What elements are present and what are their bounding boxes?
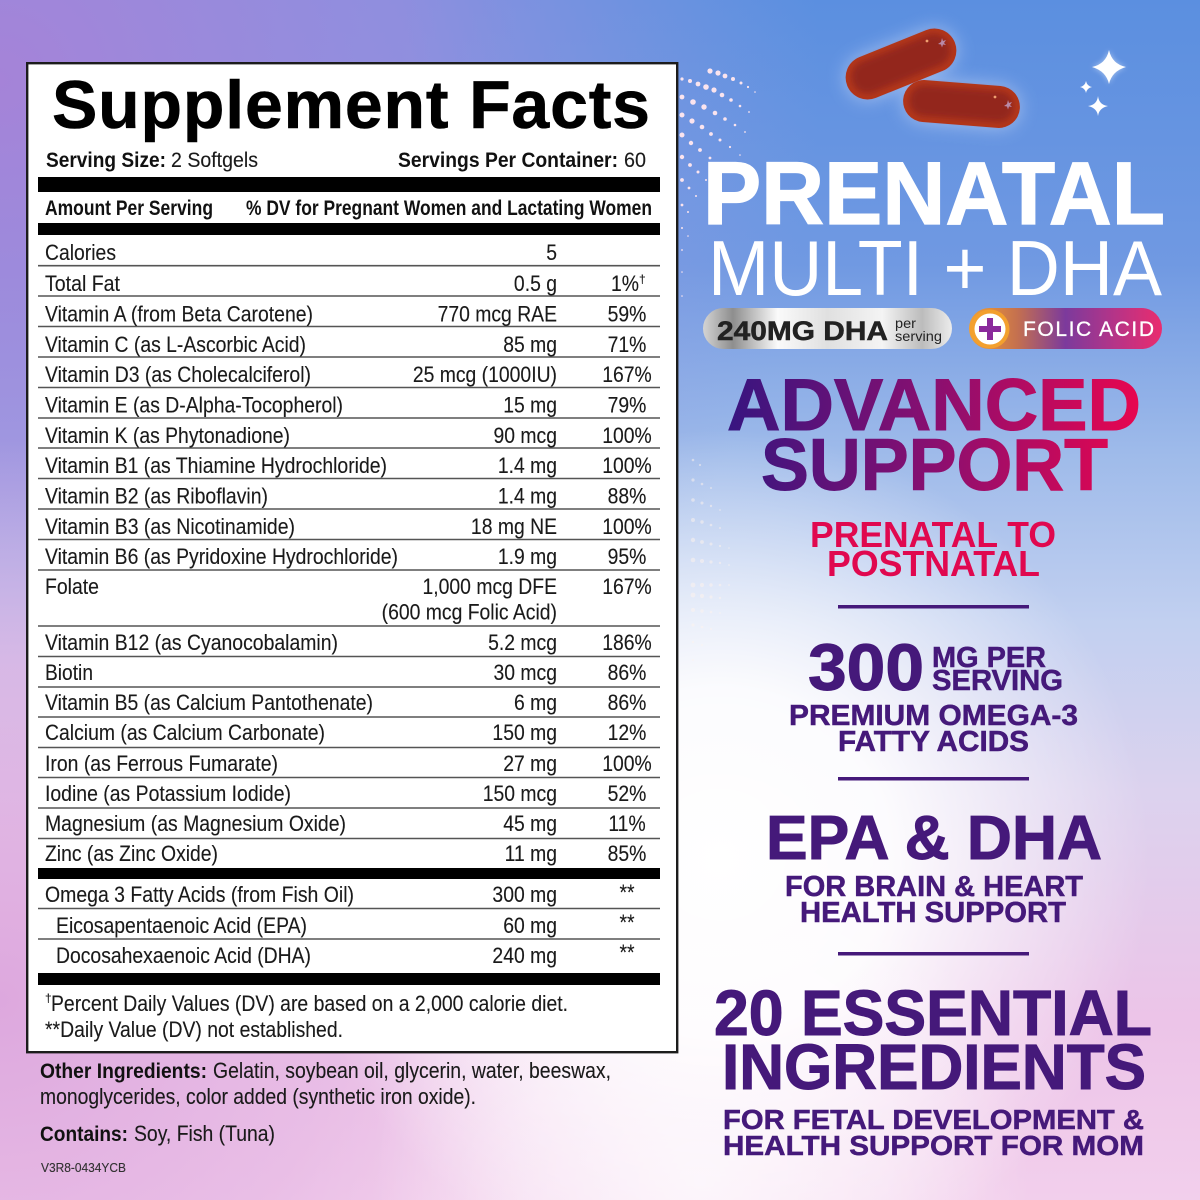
stat: 300 mg per serving: SERVING (932, 665, 1063, 697)
heading: 20 essential ingredients: INGREDIENTS (722, 1031, 1146, 1103)
row: iron: 27 mg (503, 752, 557, 776)
row: vitamin B5 (45, 690, 646, 715)
subheading: prenatal to postnatal: POSTNATAL (827, 543, 1040, 584)
amount per serving header (45, 197, 652, 220)
row: vitamin C: 85 mg (503, 333, 557, 357)
row: folate: Folate (45, 574, 99, 599)
badge: plus folic acid: FOLIC ACID (1023, 318, 1154, 341)
text: premium omega-3 fatty acids: PREMIUM OMEGA-3 (789, 700, 1078, 732)
row: biotin (45, 660, 646, 685)
subtitle: MULTI + DHA: MULTI + DHA (708, 224, 1162, 312)
row: folate (45, 574, 652, 625)
row: iron: 100% (602, 752, 652, 776)
other ingredients text (40, 1058, 611, 1109)
row: vitamin B5: Vitamin B5 (as Calcium Pantothenate) (45, 690, 373, 715)
badge: 240MG DHA per serving: 240MG DHA (717, 316, 888, 346)
row: total fat: 0.5 g (514, 272, 557, 296)
row: vitamin B6: 1.9 mg (498, 545, 557, 569)
row: vitamin C: 71% (608, 333, 646, 357)
row: vitamin B2: Vitamin B2 (as Riboflavin) (45, 484, 268, 508)
contains text: Soy, Fish (Tuna) (134, 1121, 275, 1146)
badge: 240MG DHA per serving: serving (895, 328, 942, 344)
row: vitamin B12: Vitamin B12 (as Cyanocobalamin) (45, 630, 338, 655)
row: iodine: 150 mcg (483, 782, 557, 806)
row: folate: (600 mcg Folic Acid) (382, 600, 557, 625)
badge: 240MG DHA per serving: per (895, 315, 916, 331)
subheading: prenatal to postnatal: PRENATAL TO (810, 514, 1056, 555)
serving size: 2 Softgels (171, 149, 258, 172)
row: vitamin B5: 6 mg (514, 691, 557, 715)
contains text: Contains: (40, 1123, 128, 1146)
serving size (46, 149, 258, 172)
row: zinc: 11 mg (505, 842, 557, 866)
row: iodine: 52% (608, 782, 646, 806)
text: for brain and heart health support: HEALTH SUPPORT (800, 897, 1066, 929)
row: vitamin B2: 88% (608, 484, 646, 509)
row: folate: 1,000 mcg DFE (423, 575, 557, 599)
row: omega 3: 300 mg (492, 883, 557, 907)
amount per serving header: Amount Per Serving (45, 197, 213, 220)
row: vitamin E (45, 392, 646, 418)
row: vitamin B2 (45, 484, 646, 509)
row: DHA (56, 941, 635, 968)
row: magnesium: 45 mg (503, 812, 557, 836)
row: biotin: 30 mcg (494, 661, 557, 685)
other ingredients text: monoglycerides, color added (synthetic iron oxide). (40, 1084, 476, 1109)
stat: 300 mg per serving (808, 630, 1063, 704)
row: vitamin B3 (45, 514, 652, 539)
row: omega 3: Omega 3 Fatty Acids (from Fish Oil) (45, 882, 354, 907)
row: biotin: 86% (608, 661, 646, 685)
row: vitamin D3: 25 mcg (1000IU) (413, 363, 557, 387)
row: vitamin C (45, 332, 646, 357)
row: vitamin B6: 95% (608, 545, 646, 569)
text: for fetal development and health support for mom: HEALTH SUPPORT FOR MOM (723, 1130, 1144, 1161)
row: zinc: 85% (608, 842, 646, 866)
row: magnesium (45, 811, 646, 836)
heading: Supplement Facts: Supplement Facts (52, 67, 650, 143)
text: for brain and heart health support: FOR BRAIN & HEART (785, 871, 1083, 903)
halftone dot pattern (680, 68, 756, 297)
row: folate: 167% (602, 575, 652, 599)
contains text (40, 1121, 275, 1146)
badge: 240MG DHA per serving (703, 308, 952, 349)
row: calcium: 12% (608, 721, 646, 745)
stat: 300 mg per serving: 300 (808, 630, 924, 704)
row: magnesium: Magnesium (as Magnesium Oxide) (45, 811, 346, 836)
row: vitamin B3: 18 mg NE (471, 515, 557, 539)
row: vitamin B12 (45, 630, 652, 655)
title: PRENATAL: PRENATAL (703, 143, 1165, 243)
row: vitamin K (45, 423, 652, 448)
row: vitamin B6 (45, 544, 646, 569)
badge: plus folic acid (969, 308, 1162, 349)
footnotes: **Daily Value (DV) not established. (45, 1017, 343, 1042)
row: iron: Iron (as Ferrous Fumarate) (45, 751, 278, 776)
icon: sparkles (1080, 50, 1126, 116)
heading: ADVANCED SUPPORT: SUPPORT (761, 425, 1108, 506)
row: vitamin A: 770 mcg RAE (438, 302, 557, 327)
row: vitamin B1: Vitamin B1 (as Thiamine Hydrochloride) (45, 453, 387, 478)
footnotes: Percent Daily Values (DV) are based on a 2,000 calorie diet. (51, 991, 568, 1016)
row: vitamin B1: 100% (602, 454, 652, 478)
row: vitamin B2: 1.4 mg (498, 484, 557, 509)
row: zinc: Zinc (as Zinc Oxide) (45, 841, 218, 866)
row: vitamin B3: Vitamin B3 (as Nicotinamide) (45, 514, 295, 539)
text: premium omega-3 fatty acids: FATTY ACIDS (838, 726, 1029, 758)
servings per container: 60 (624, 149, 646, 172)
heading: 20 essential ingredients: 20 ESSENTIAL (714, 977, 1152, 1049)
row: omega 3 (45, 881, 635, 907)
heading: ADVANCED SUPPORT (727, 365, 1141, 506)
row: vitamin E: 79% (608, 393, 646, 418)
row: vitamin D3: Vitamin D3 (as Cholecalciferol) (45, 362, 311, 387)
row: iodine: Iodine (as Potassium Iodide) (45, 781, 291, 806)
heading: 20 essential ingredients (714, 977, 1152, 1103)
text: for brain and heart health support (785, 871, 1083, 929)
row: zinc (45, 841, 646, 866)
footnotes (45, 991, 568, 1042)
row: omega 3: ** (619, 881, 635, 905)
row: calcium: Calcium (as Calcium Carbonate) (45, 720, 325, 745)
row: EPA: ** (619, 911, 635, 935)
row: DHA: 240 mg (492, 944, 557, 968)
row: calories (45, 240, 557, 265)
row: vitamin B1: 1.4 mg (498, 454, 557, 478)
text: for fetal development and health support for mom (723, 1104, 1144, 1161)
row: vitamin A: 59% (608, 302, 646, 327)
subheading: prenatal to postnatal (810, 514, 1056, 584)
text: for fetal development and health support for mom: FOR FETAL DEVELOPMENT & (723, 1104, 1144, 1135)
row: biotin: Biotin (45, 660, 93, 685)
row: total fat: † (639, 272, 646, 286)
stat: 300 mg per serving: MG PER (932, 642, 1046, 674)
row: vitamin A: Vitamin A (from Beta Carotene) (45, 302, 313, 326)
other ingredients text: Other Ingredients: (40, 1060, 207, 1083)
row: calories: Calories (45, 240, 116, 265)
heading: EPA & DHA: EPA & DHA (766, 804, 1102, 873)
row: vitamin B6: Vitamin B6 (as Pyridoxine Hydrochloride) (45, 544, 398, 569)
row: vitamin D3: 167% (602, 363, 652, 387)
icon: softgel capsules (839, 22, 1021, 130)
row: vitamin A (45, 302, 646, 327)
row: vitamin K: 90 mcg (494, 424, 557, 448)
row: iodine (45, 781, 646, 806)
row: vitamin B5: 86% (608, 691, 646, 715)
panel: supplement facts (27, 63, 677, 1052)
row: EPA (56, 911, 635, 938)
row: magnesium: 11% (608, 812, 646, 836)
row: vitamin K: Vitamin K (as Phytonadione) (45, 423, 290, 448)
row: vitamin K: 100% (602, 424, 652, 448)
footnotes: † (45, 991, 52, 1005)
row: vitamin B12: 5.2 mcg (488, 631, 557, 655)
row: vitamin B3: 100% (602, 515, 652, 539)
row: calcium (45, 720, 646, 745)
row: vitamin E: 15 mg (503, 393, 557, 418)
heading: ADVANCED SUPPORT: ADVANCED (727, 365, 1141, 446)
row: total fat: 1% (611, 271, 639, 296)
amount per serving header: % DV for Pregnant Women and Lactating Women (246, 197, 652, 220)
row: EPA: 60 mg (503, 914, 557, 938)
row: DHA: ** (619, 941, 635, 965)
divider rules (38, 266, 660, 939)
row: vitamin B1 (45, 453, 652, 478)
row: EPA: Eicosapentaenoic Acid (EPA) (56, 913, 307, 938)
lot code: V3R8-0434YCB (41, 1160, 126, 1175)
row: total fat: Total Fat (45, 271, 120, 296)
other ingredients text: Gelatin, soybean oil, glycerin, water, beeswax, (213, 1058, 611, 1083)
row: calories: 5 (546, 241, 557, 265)
row: vitamin E: Vitamin E (as D-Alpha-Tocopherol) (45, 392, 343, 418)
row: vitamin D3 (45, 362, 652, 387)
servings per container: Servings Per Container: (398, 149, 618, 172)
row: DHA: Docosahexaenoic Acid (DHA) (56, 943, 311, 968)
row: calcium: 150 mg (492, 721, 557, 745)
row: iron (45, 751, 652, 776)
halftone dots lower (691, 459, 730, 661)
row: total fat (45, 271, 646, 296)
serving size: Serving Size: (46, 149, 166, 172)
text: premium omega-3 fatty acids (789, 700, 1078, 758)
row: vitamin C: Vitamin C (as L-Ascorbic Acid) (45, 332, 306, 357)
row: vitamin B12: 186% (602, 631, 652, 655)
